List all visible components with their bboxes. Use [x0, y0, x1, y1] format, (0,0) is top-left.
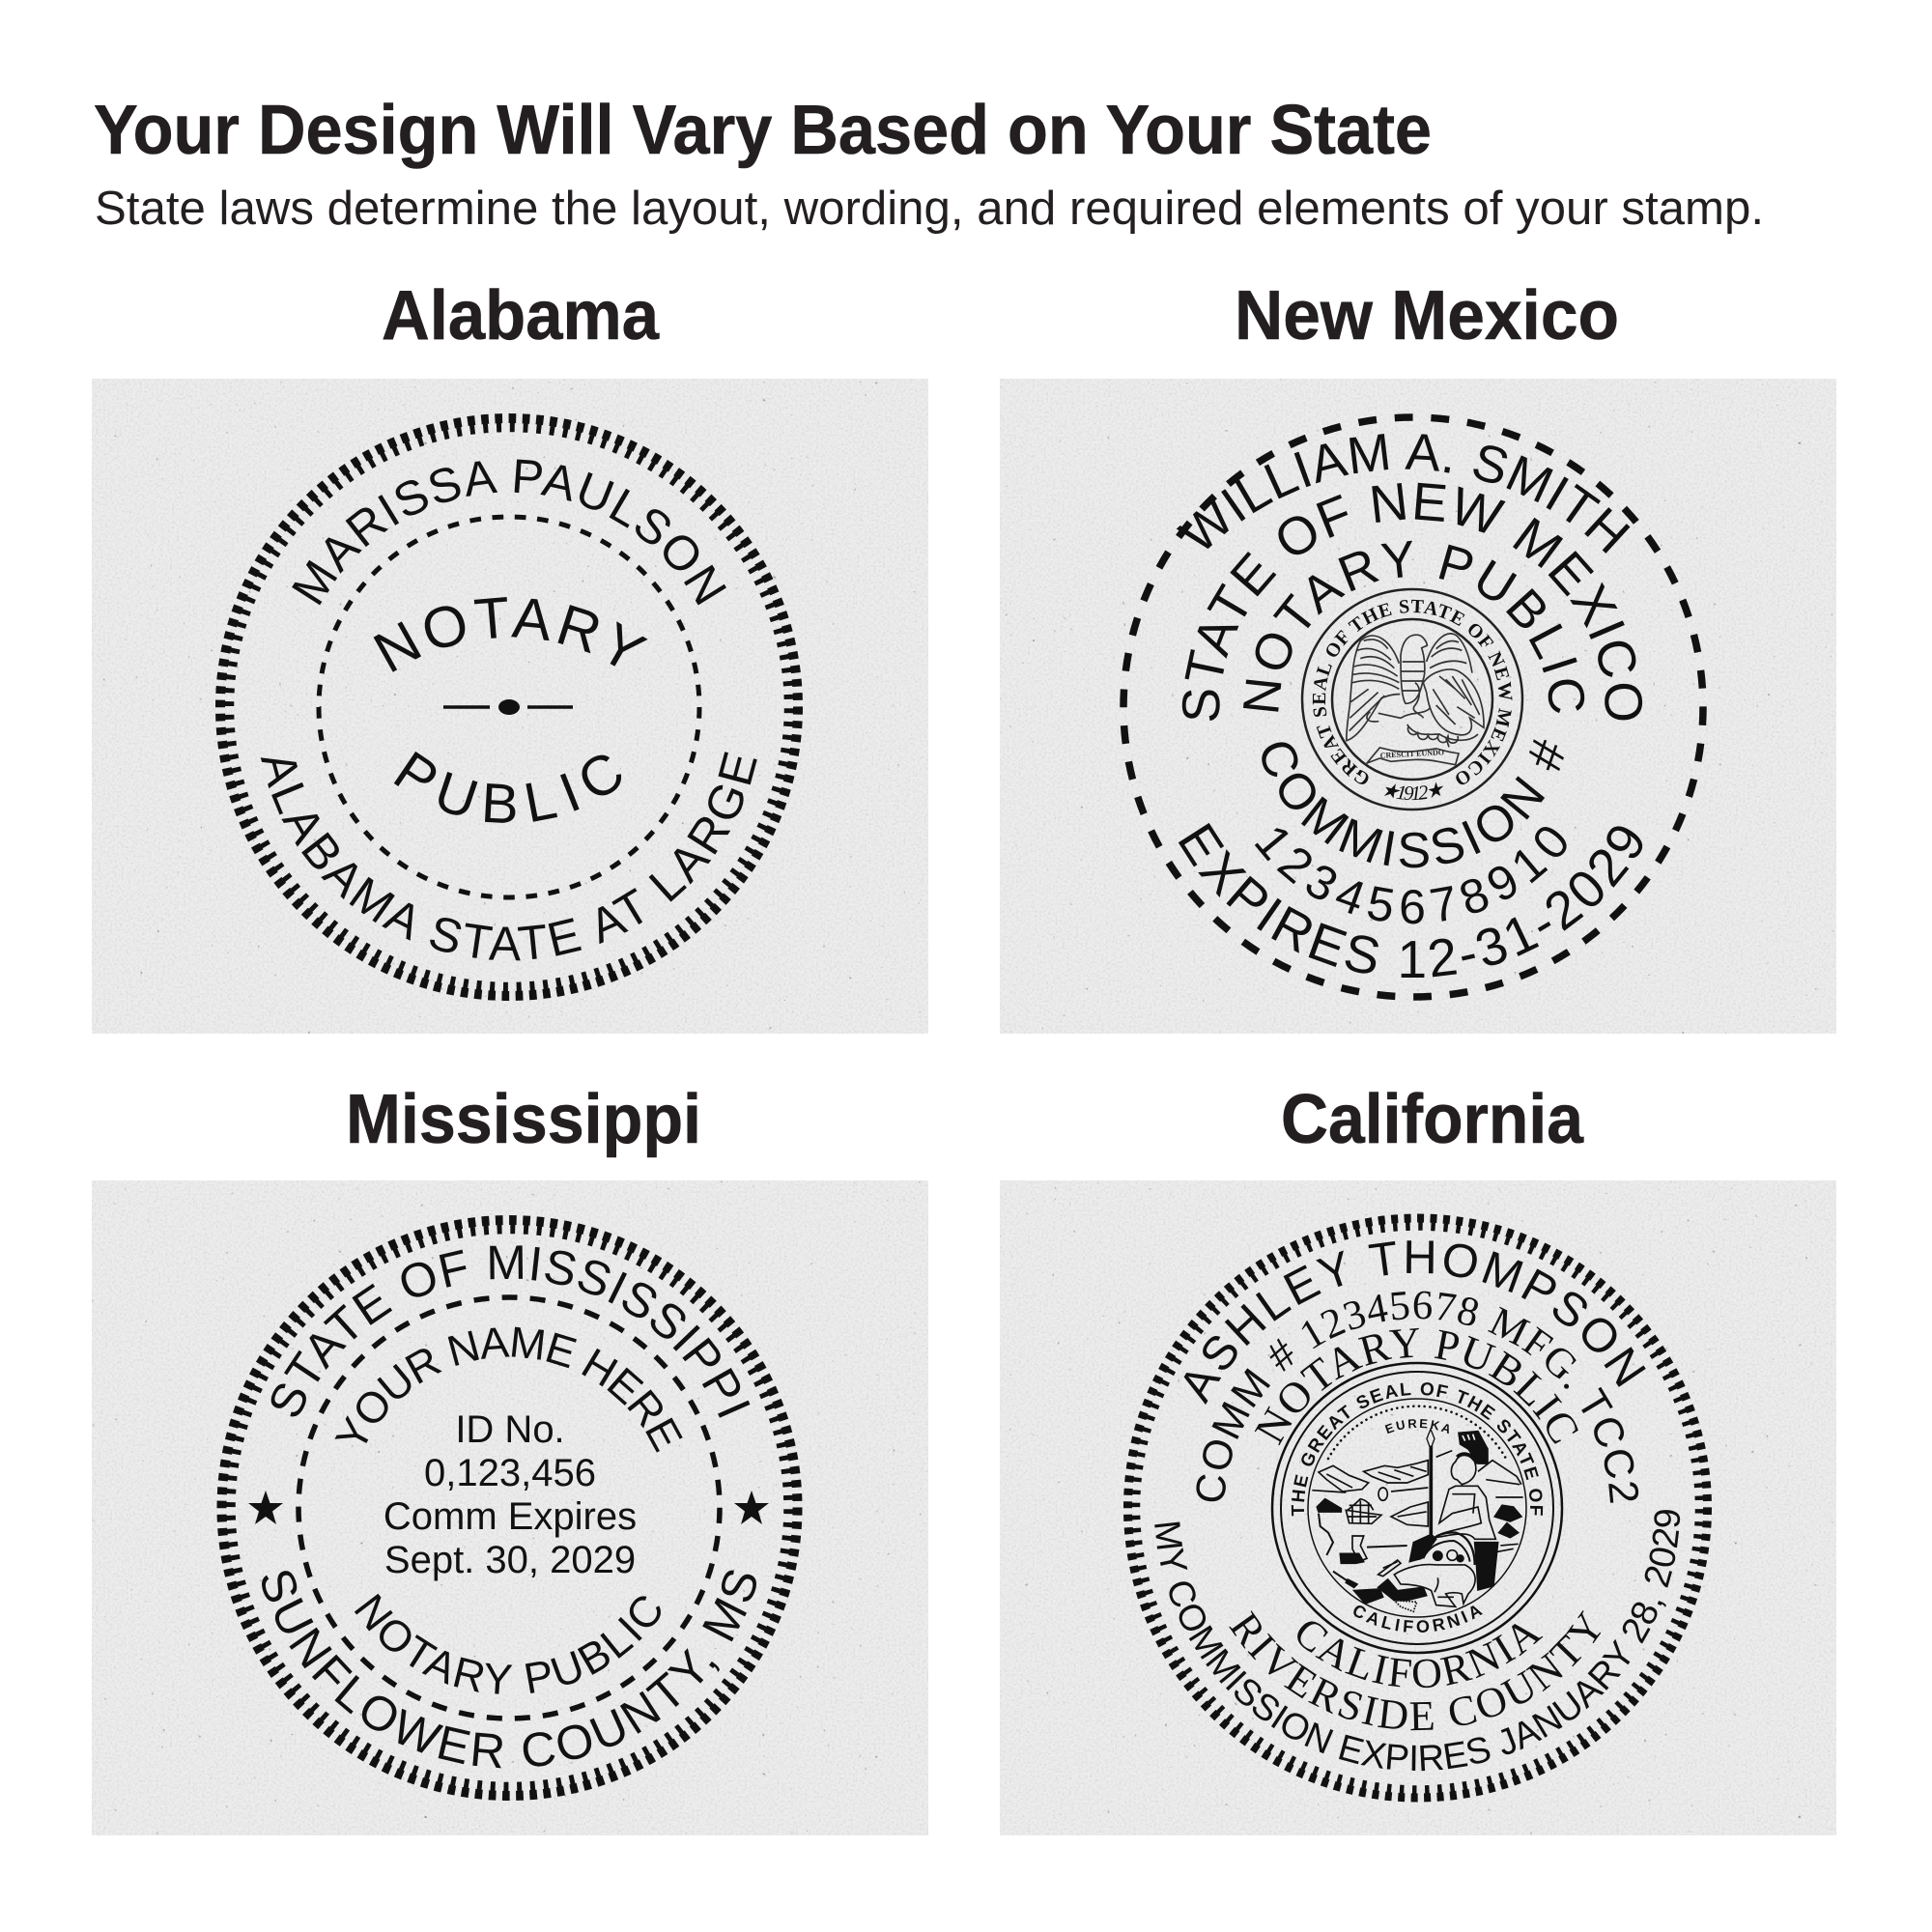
text: name: WILLIAM A. SMITH	[1177, 434, 1631, 554]
text: expiration: MY COMMISSION EXPIRES JANUARY 28, 2029	[1154, 1510, 1681, 1772]
text: state: STATE OF MISSISSIPPI	[270, 1245, 750, 1418]
stamp: New Mexico	[1123, 417, 1703, 997]
text: commission id: COMM # 12345678 MFG. TCC2	[1196, 1291, 1638, 1503]
text: center block: ID No.	[455, 1408, 565, 1451]
dashed inner ring	[319, 517, 699, 897]
panel: New Mexico paper	[1000, 379, 1836, 1034]
text: name: ASHLEY THOMPSON	[1184, 1240, 1646, 1405]
icon: great seal of New Mexico: GREAT SEAL OF THE STATE OF NEW MEXICO	[1312, 599, 1513, 784]
icon: great seal of New Mexico: ★1912★	[1383, 782, 1443, 800]
text: expires: EXPIRES 12-31-2029	[1179, 823, 1642, 978]
icon: great seal of California	[1272, 1363, 1562, 1653]
icon: great seal of California: THE GREAT SEAL OF THE STATE OF	[1291, 1382, 1544, 1517]
dashed inner ring	[298, 1297, 720, 1719]
text: notary public: NOTARY PUBLIC	[1254, 1327, 1578, 1445]
text: commission: COMMISSION #	[1262, 739, 1564, 867]
panel: California paper	[1000, 1180, 1836, 1835]
heading: Mississippi: Mississippi	[346, 1081, 701, 1158]
heading: Alabama: Alabama	[382, 277, 660, 355]
stamp: California	[1128, 1218, 1708, 1798]
text: NOTARY: NOTARY	[373, 597, 648, 672]
text: center block: Comm Expires	[384, 1495, 637, 1538]
heading: California: California	[1281, 1081, 1584, 1158]
icon: left star	[248, 1491, 283, 1524]
panel: Mississippi paper	[92, 1180, 928, 1835]
title: Your Design Will Vary Based on Your State	[94, 92, 1432, 169]
tick ring	[220, 418, 798, 996]
text: center block: 0,123,456	[424, 1452, 596, 1494]
icon: great seal of New Mexico: CRESCIT EUNDO	[1380, 748, 1444, 760]
text: county line: ALABAMA STATE AT LARGE	[261, 752, 757, 960]
stamp: Mississippi	[222, 1220, 798, 1796]
heading: New Mexico: New Mexico	[1235, 277, 1619, 355]
text: state: STATE OF NEW MEXICO	[1182, 483, 1642, 721]
text: county: RIVERSIDE COUNTY	[1229, 1610, 1602, 1731]
text: PUBLIC: PUBLIC	[394, 752, 622, 823]
dashed outer ring	[1123, 417, 1703, 997]
text: name: MARISSA PAULSON	[292, 460, 726, 605]
text: number: 12345678910	[1254, 827, 1567, 923]
text: california: CALIFORNIA	[1297, 1621, 1544, 1689]
panel: Alabama paper	[92, 379, 928, 1034]
text: center block	[384, 1408, 637, 1581]
icon: great seal of California: CALIFORNIA	[1353, 1605, 1483, 1633]
text: notary public: NOTARY PUBLIC	[354, 1594, 661, 1694]
text: notary public: NOTARY PUBLIC	[1243, 541, 1584, 713]
stamp: Alabama	[215, 413, 803, 1001]
text: county: SUNFLOWER COUNTY, MS	[262, 1571, 756, 1768]
tick ring	[1128, 1218, 1708, 1798]
center divider	[443, 699, 573, 715]
tick ring	[222, 1220, 798, 1796]
text: center block: Sept. 30, 2029	[384, 1539, 636, 1581]
icon: great seal of California: EUREKA	[1385, 1419, 1449, 1434]
icon: right star	[734, 1491, 769, 1524]
text: name: YOUR NAME HERE	[334, 1327, 683, 1453]
subtitle: State laws determine the layout, wording, and required elements of your stamp.	[95, 183, 1764, 235]
